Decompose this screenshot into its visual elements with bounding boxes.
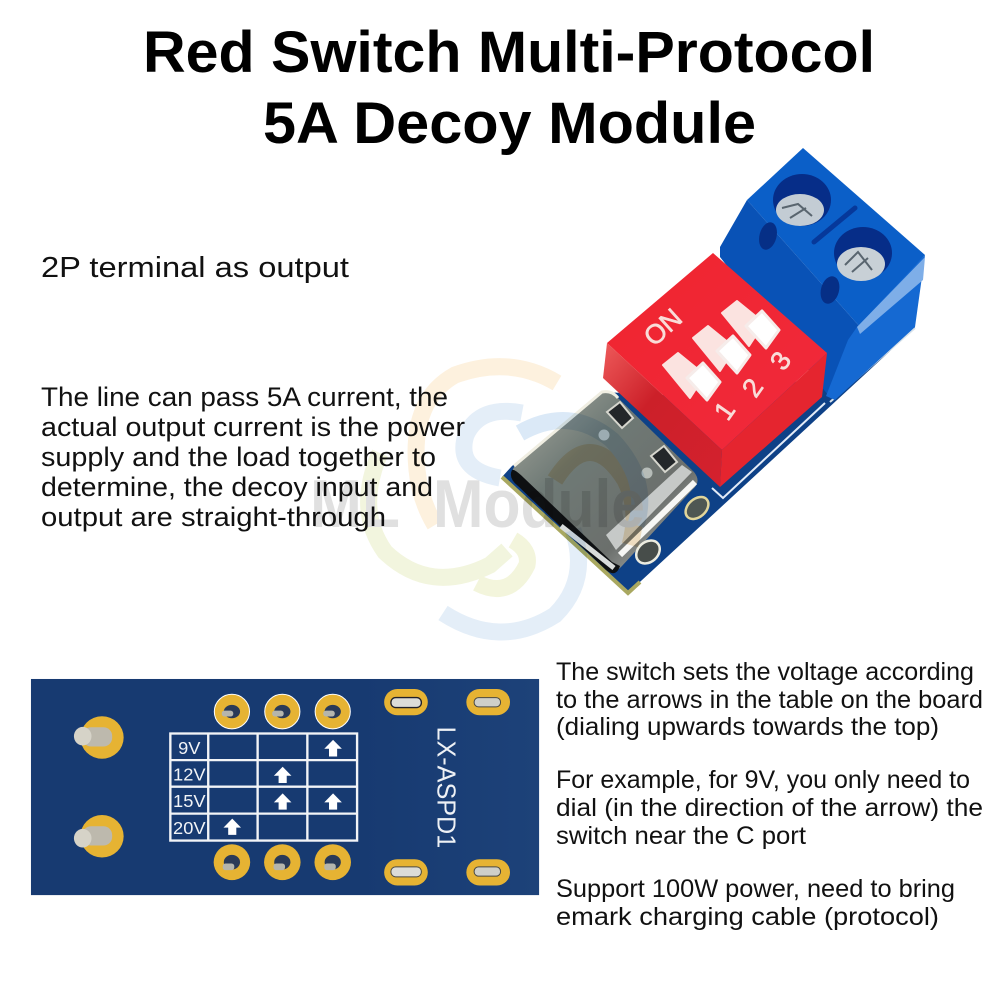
text: example: switch near the C port [556,822,806,850]
title: Red Switch Multi-Protocol [143,20,875,85]
switch 1 [663,353,720,400]
switch 3 [722,301,779,348]
text: line current: supply and the load together to [41,442,436,472]
usb shell pads [384,689,510,885]
dip switch [603,253,827,487]
text: line current: determine, the decoy input and [41,472,433,502]
text: power support: Support 100W power, need to bring [556,875,955,903]
dip switch: 1 [708,396,741,426]
text: line current: actual output current is the power [41,412,465,442]
voltage table [170,734,357,841]
left terminal pins [74,716,124,858]
voltage table: 9V [178,738,200,758]
pcb back panel [31,679,539,895]
dip switch: 2 [736,373,769,403]
text: example: For example, for 9V, you only need to [556,766,970,794]
watermark logo [310,367,645,632]
dip switch pads [214,694,351,880]
terminal block [720,148,925,400]
text: line current: The line can pass 5A current, the [41,382,448,412]
voltage table: 20V [173,818,206,838]
pcb [502,322,915,593]
watermark logo: ML [310,466,400,542]
dip switch: ON [638,303,688,352]
text: line current: output are straight-through [41,502,386,532]
title: 5A Decoy Module [263,91,756,156]
screw right [834,227,892,279]
text: example [556,766,983,850]
text: 2P terminal: 2P terminal as output [41,252,349,284]
dip switch: 3 [764,346,797,376]
screw left [773,174,831,226]
module photo illustration [502,148,925,593]
text: switch instructions [556,658,983,741]
voltage table: 12V [173,765,206,785]
usb-c connector [511,392,713,573]
voltage table: 15V [173,791,206,811]
board label: LX-ASPD1 [431,727,459,848]
text: switch instructions: (dialing upwards towards the top) [556,713,939,741]
title [143,20,875,156]
watermark logo: Module [433,466,645,542]
text: example: dial (in the direction of the arrow) the [556,794,983,822]
switch 2 [693,326,750,373]
text: line current [41,382,465,532]
text: power support: emark charging cable (protocol) [556,903,939,931]
text: switch instructions: The switch sets the voltage according [556,658,974,686]
text: switch instructions: to the arrows in the table on the board [556,686,983,714]
text: power support [556,875,955,931]
